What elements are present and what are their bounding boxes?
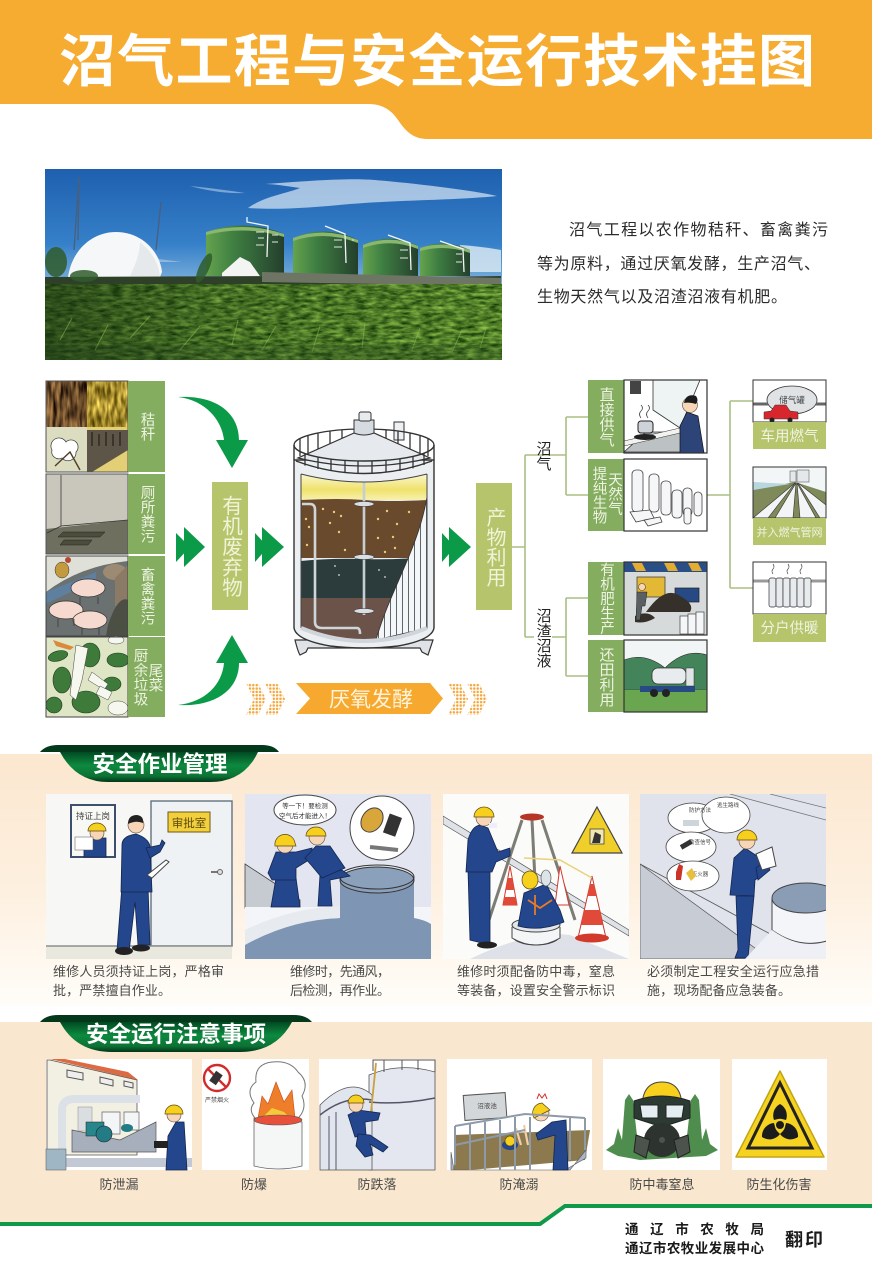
product card: direct gas supply: 直接供气 xyxy=(598,387,614,447)
panel: leak prevention xyxy=(46,1059,192,1170)
caption: ventilate then test xyxy=(290,964,390,998)
input panel: kitchen and vegetable waste: 尾菜 xyxy=(146,663,163,692)
caption: certified work: 维修人员须持证上岗，严格审 xyxy=(53,964,224,979)
use card: vehicle fuel xyxy=(753,380,826,449)
panel: certified work xyxy=(46,794,232,959)
use card: household heating: 分户供暖 xyxy=(760,620,819,637)
input panel: kitchen and vegetable waste: 厨余垃圾 xyxy=(132,648,148,706)
caption: ventilate then test: 后检测，再作业。 xyxy=(290,983,390,998)
title: 沼气工程与安全运行技术挂图 xyxy=(59,30,815,94)
panel: poison and suffocation prevention xyxy=(603,1059,720,1170)
product card: direct gas supply xyxy=(588,380,707,453)
panel: certified work: 持证上岗 xyxy=(76,811,110,821)
panel: ventilate then test: 等一下！要检测 xyxy=(282,801,328,810)
caption: biohazard prevention: 防生化伤害 xyxy=(746,1177,812,1192)
input panel: straw: 秸秆 xyxy=(138,412,155,441)
panel: emergency plan xyxy=(640,794,840,959)
double arrow into organic waste xyxy=(176,527,205,567)
section background: operating precautions xyxy=(0,1022,872,1224)
input panel: toilet waste: 厕所粪污 xyxy=(138,485,155,543)
input panel: livestock waste: 畜禽粪污 xyxy=(138,567,155,625)
footer organisations: 通辽市农牧业发展中心 xyxy=(625,1240,764,1256)
label: biogas: 沼气 xyxy=(534,441,552,471)
box: organic waste: 有机废弃物 xyxy=(218,495,243,597)
photo: biogas plant in grass field xyxy=(45,169,502,360)
caption: emergency plan: 施，现场配备应急装备。 xyxy=(647,983,791,998)
dotted chevrons right xyxy=(448,683,487,715)
double arrow into tank xyxy=(255,527,284,567)
heading: operating precautions xyxy=(40,1015,312,1052)
product card: purified natural gas: 天然气 xyxy=(606,472,622,516)
intro text: 生物天然气以及沼渣沼液有机肥。 xyxy=(537,288,787,306)
caption: protective equipment: 等装备，设置安全警示标识 xyxy=(457,983,615,998)
caption: emergency plan: 必须制定工程安全运行应急措 xyxy=(647,964,819,979)
curved arrow bottom xyxy=(178,635,248,705)
box: product use: 产物利用 xyxy=(483,507,506,587)
use card: vehicle fuel: 储气罐 xyxy=(779,395,805,405)
footer organisations: 通辽市农牧局 xyxy=(625,1221,764,1237)
box: organic waste xyxy=(212,482,248,610)
panel: emergency plan: 逃生路线 xyxy=(717,801,739,809)
caption: protective equipment: 维修时须配备防中毒，窒息 xyxy=(457,964,615,979)
caption: protective equipment xyxy=(457,964,615,998)
use card: gas grid xyxy=(753,467,826,545)
panel: drowning prevention xyxy=(447,1059,592,1170)
caption: drowning prevention: 防淹溺 xyxy=(499,1177,539,1192)
product card: purified natural gas: 提纯生物 xyxy=(590,466,607,525)
use card: household heating xyxy=(753,562,826,642)
caption: ventilate then test: 维修时，先通风， xyxy=(290,964,390,979)
product card: organic fertiliser production xyxy=(588,562,707,635)
use card: gas grid: 并入燃气管网 xyxy=(756,525,822,539)
caption: explosion prevention: 防爆 xyxy=(241,1177,267,1192)
panel: biohazard prevention xyxy=(732,1059,827,1170)
reactor contents xyxy=(301,474,427,642)
intro text xyxy=(537,221,828,306)
caption: certified work: 批，严禁擅自作业。 xyxy=(53,983,171,998)
heading: safe work management xyxy=(40,745,279,782)
input panel: kitchen and vegetable waste xyxy=(46,636,165,717)
biogas digester tank xyxy=(294,412,434,655)
double arrow into products xyxy=(442,527,471,567)
product card: organic fertiliser production: 有机肥生产 xyxy=(598,562,614,635)
panel: explosion prevention xyxy=(202,1059,309,1170)
footer reprint mark: 翻印 xyxy=(785,1230,823,1250)
footer organisations xyxy=(625,1221,764,1256)
panel: drowning prevention: 沼液池 xyxy=(477,1101,497,1110)
panel: certified work: 审批室 xyxy=(172,816,206,830)
intro text: 等为原料，通过厌氧发酵，生产沼气、 xyxy=(537,255,820,273)
footer green rule xyxy=(0,1206,872,1224)
header banner xyxy=(0,0,872,139)
panel: ventilate then test: 空气后才能进入！ xyxy=(279,811,331,820)
input panel: livestock waste xyxy=(46,556,165,636)
panel: emergency plan: 防护方法 xyxy=(689,806,711,814)
product card: return to field: 还田利用 xyxy=(598,647,614,708)
panel: emergency plan: 灭火器 xyxy=(692,871,709,878)
heading: safe work management: 安全作业管理 xyxy=(92,752,228,777)
heading: operating precautions: 安全运行注意事项 xyxy=(86,1022,266,1047)
digester tanks xyxy=(206,217,470,276)
caption: leak prevention: 防泄漏 xyxy=(99,1177,139,1192)
panel: ventilate then test xyxy=(245,794,431,959)
product card: purified natural gas xyxy=(588,459,707,531)
box: product use xyxy=(476,483,512,610)
curved arrow top xyxy=(178,397,248,468)
panel: explosion prevention: 严禁烟火 xyxy=(205,1096,229,1104)
panel: protective equipment xyxy=(443,794,629,959)
use card: vehicle fuel: 车用燃气 xyxy=(760,427,818,445)
intro text: 沼气工程以农作物秸秆、畜禽粪污 xyxy=(569,221,828,239)
product card: return to field xyxy=(588,640,707,712)
section background: safe work management xyxy=(0,754,872,1006)
panel: fall prevention xyxy=(319,1059,435,1170)
fermentation banner xyxy=(296,683,443,714)
label: digestate: 沼渣沼液 xyxy=(534,608,552,668)
input panel: straw xyxy=(46,381,165,472)
caption: poison and suffocation prevention: 防中毒窒息 xyxy=(629,1177,695,1192)
caption: fall prevention: 防跌落 xyxy=(357,1177,397,1192)
input panel: toilet waste xyxy=(46,474,165,554)
caption: emergency plan xyxy=(647,964,819,998)
tree connectors xyxy=(512,401,753,676)
dotted chevrons left xyxy=(246,683,285,715)
panel: emergency plan: 勘查信号 xyxy=(689,838,711,846)
caption: certified work xyxy=(53,964,224,998)
fermentation banner: 厌氧发酵 xyxy=(329,688,413,712)
